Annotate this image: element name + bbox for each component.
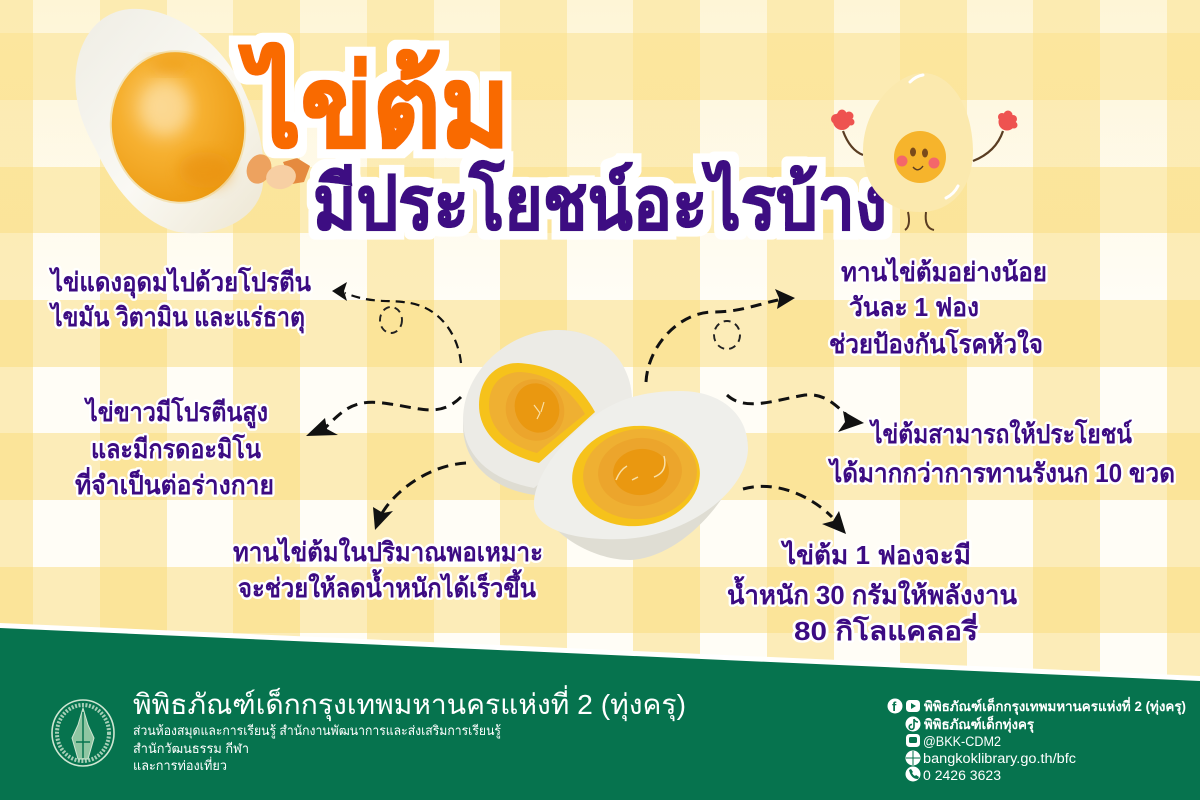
icon: right hand xyxy=(998,110,1018,130)
logo: city seal xyxy=(52,700,114,766)
contact list: @BKK-CDM2 xyxy=(923,734,1001,749)
footer organisation text: สำนักวัฒนธรรม กีฬา xyxy=(133,741,249,756)
icon: small eggs xyxy=(243,151,310,191)
footer band xyxy=(0,623,1200,800)
contact list: 0 2426 3623 xyxy=(923,768,1001,783)
text: egg white benefit: และมีกรดอะมิโน xyxy=(91,433,261,464)
arrow: to yolk text xyxy=(332,282,461,363)
text: egg white benefit: ไข่ขาวมีโปรตีนสูง xyxy=(83,396,268,429)
text: heart benefit: ทานไข่ต้มอย่างน้อย xyxy=(841,256,1047,287)
footer heading: พิพิธภัณฑ์เด็กกรุงเทพมหานครแห่งที่ 2 (ทุ่งครุ) xyxy=(133,685,686,722)
arrow: to egg white text xyxy=(306,397,461,436)
arrow: to weight text xyxy=(373,463,466,530)
text: heart benefit: วันละ 1 ฟอง xyxy=(849,292,979,322)
text: calorie fact xyxy=(727,539,1017,646)
text: yolk benefit xyxy=(48,266,311,334)
text: egg white benefit: ที่จำเป็นต่อร่างกาย xyxy=(75,466,274,500)
text: milk benefit: ไข่ต้มสามารถให้ประโยชน์ xyxy=(868,418,1132,449)
contact list: f xyxy=(892,699,897,714)
contact list: bangkoklibrary.go.th/bfc xyxy=(923,751,1076,766)
arrow: to calorie text xyxy=(743,486,846,534)
contact list: พิพิธภัณฑ์เด็กกรุงเทพมหานครแห่งที่ 2 (ทุ่งครุ) xyxy=(924,696,1186,715)
footer organisation text xyxy=(133,723,501,773)
arrow: to heart text xyxy=(646,289,795,382)
text: weight benefit: จะช่วยให้ลดน้ำหนักได้เร็วขึ้น xyxy=(238,568,536,603)
text: heart benefit: ช่วยป้องกันโรคหัวใจ xyxy=(829,328,1043,359)
text: weight benefit xyxy=(233,536,543,603)
arrow: to milk text xyxy=(727,395,864,432)
text: weight benefit: ทานไข่ต้มในปริมาณพอเหมาะ xyxy=(233,536,543,567)
text: milk benefit: ได้มากกว่าการทานรังนก 10 ขวด xyxy=(827,457,1175,488)
text: yolk benefit: ไขมัน วิตามิน และแร่ธาตุ xyxy=(48,301,305,334)
text: egg white benefit xyxy=(75,396,274,500)
title xyxy=(239,43,887,245)
illustration: halved egg top-left xyxy=(75,9,310,233)
text: heart benefit xyxy=(829,256,1047,359)
text: calorie fact: น้ำหนัก 30 กรัมให้พลังงาน xyxy=(727,575,1017,610)
subtitle: มีประโยชน์อะไรบ้าง xyxy=(313,159,887,245)
text: calorie fact: 80 กิโลแคลอรี่ xyxy=(794,612,978,646)
back egg half xyxy=(463,330,632,495)
icon: left hand xyxy=(831,110,854,130)
icon: egg mascot xyxy=(831,73,1018,230)
text: milk benefit xyxy=(827,418,1175,488)
front egg half xyxy=(534,391,748,560)
footer organisation text: และการท่องเที่ยว xyxy=(133,757,227,773)
illustration: centre boiled egg halves xyxy=(463,330,748,560)
title: ไข่ต้ม xyxy=(239,43,510,170)
text: calorie fact: ไข่ต้ม 1 ฟองจะมี xyxy=(780,539,971,570)
contact list xyxy=(888,696,1186,783)
text: yolk benefit: ไข่แดงอุดมไปด้วยโปรตีน xyxy=(48,266,311,299)
contact list: พิพิธภัณฑ์เด็กทุ่งครุ xyxy=(924,715,1035,733)
footer organisation text: ส่วนห้องสมุดและการเรียนรู้ สำนักงานพัฒนาการและส่งเสริมการเรียนรู้ xyxy=(133,723,501,739)
